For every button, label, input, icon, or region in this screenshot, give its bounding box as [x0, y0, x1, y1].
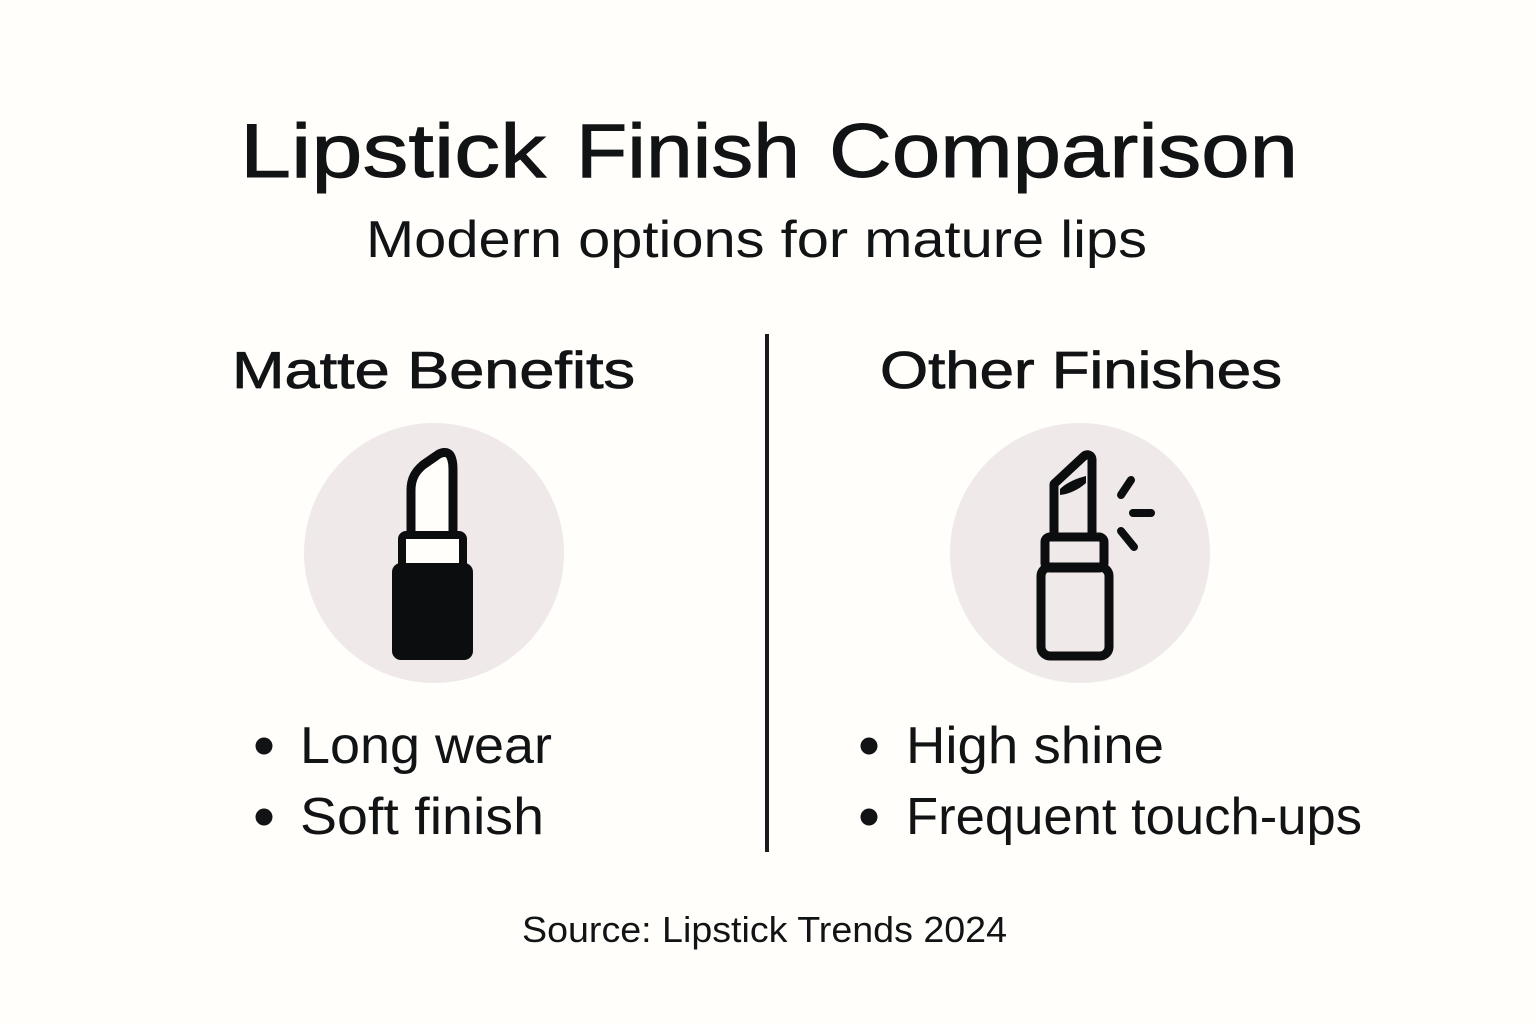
heading: matte benefits: Matte Benefits — [232, 342, 635, 400]
heading: other finishes: Other Finishes — [880, 342, 1282, 400]
bullet list: other finishes — [860, 717, 1362, 846]
bullet: soft finish: Soft finish — [300, 788, 544, 846]
bullet list: matte benefits — [256, 717, 552, 846]
subtitle: Modern options for mature lips — [366, 211, 1147, 269]
center divider — [765, 334, 769, 852]
panel: other finishes — [860, 342, 1362, 846]
bullet: high shine: High shine — [906, 717, 1164, 775]
icon: matte lipstick — [304, 423, 564, 683]
source note: Source: Lipstick Trends 2024 — [522, 909, 1007, 950]
icon: shine marks — [1121, 480, 1151, 547]
title: Finish — [576, 109, 800, 194]
panel: matte benefits — [232, 342, 635, 846]
icon: glossy lipstick — [950, 423, 1210, 683]
title: Lipstick — [240, 109, 547, 194]
title — [240, 109, 1298, 194]
bullet: frequent touch-ups: Frequent touch-ups — [906, 788, 1362, 846]
bullet: long wear: Long wear — [300, 717, 552, 775]
title: Comparison — [829, 109, 1298, 194]
